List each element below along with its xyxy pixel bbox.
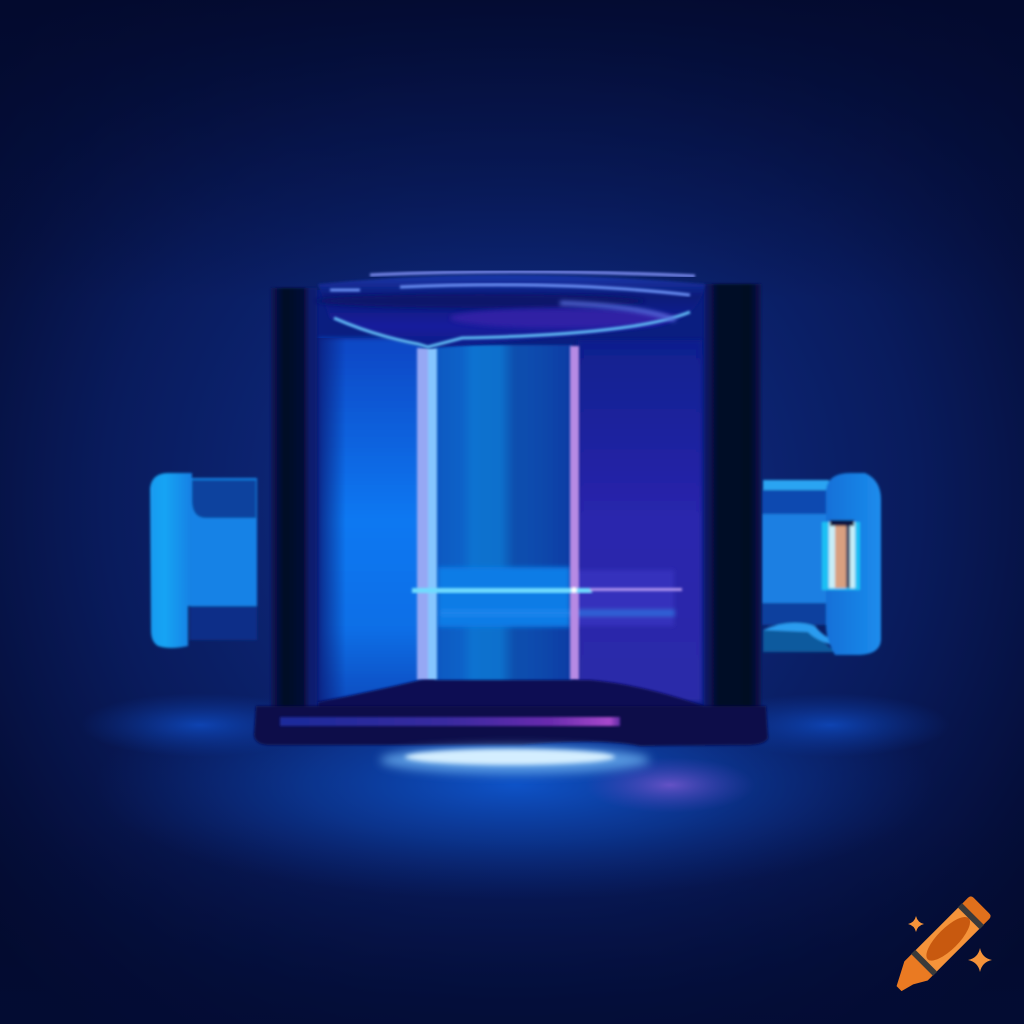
lid purple sheen <box>450 308 670 328</box>
floor glow <box>80 670 950 900</box>
connector upper band <box>762 490 834 514</box>
connector body <box>762 512 832 604</box>
lid outer rim highlight <box>370 272 695 276</box>
base of the cube <box>254 680 768 746</box>
connector lower band <box>762 603 834 625</box>
glass cube <box>254 272 768 746</box>
lid second rim highlight <box>330 285 690 295</box>
lid lower rim highlight <box>334 312 690 347</box>
base glowing stripe <box>280 717 620 726</box>
lid shadow <box>315 294 645 308</box>
lid inner sheen <box>560 303 675 320</box>
right dark pillar <box>704 284 761 709</box>
crayon logo <box>888 895 992 999</box>
crayon <box>888 895 992 999</box>
base thin line right <box>620 723 750 725</box>
light pool under the base <box>380 746 650 774</box>
glass interior back <box>312 290 706 705</box>
connector upper highlight <box>763 480 829 490</box>
connector end cap <box>150 473 192 648</box>
left glass pane <box>318 338 422 702</box>
connector body <box>190 478 257 636</box>
base plate <box>254 706 768 746</box>
connector end cap <box>826 473 881 655</box>
centre glass pane <box>434 345 572 685</box>
right glass pane <box>578 340 702 702</box>
inner liquid block <box>438 567 675 627</box>
lid of the cube <box>315 272 705 348</box>
left vertical light bar <box>417 348 437 680</box>
sparkle large <box>968 948 992 972</box>
base hump <box>318 680 704 720</box>
left connector <box>150 473 257 648</box>
right vertical light bar <box>570 346 579 680</box>
connector window with orange reflection <box>822 520 860 590</box>
connector lower teal foot <box>763 630 835 652</box>
right connector <box>762 473 881 655</box>
horizontal light line <box>412 587 682 593</box>
sparkle small <box>908 916 924 932</box>
left dark pillar <box>271 288 317 713</box>
left pane edge shading <box>316 338 346 702</box>
connector lower dark patch <box>190 606 257 640</box>
lid body <box>318 275 705 348</box>
base inner line <box>400 698 580 700</box>
connector upper dark patch <box>192 480 256 518</box>
